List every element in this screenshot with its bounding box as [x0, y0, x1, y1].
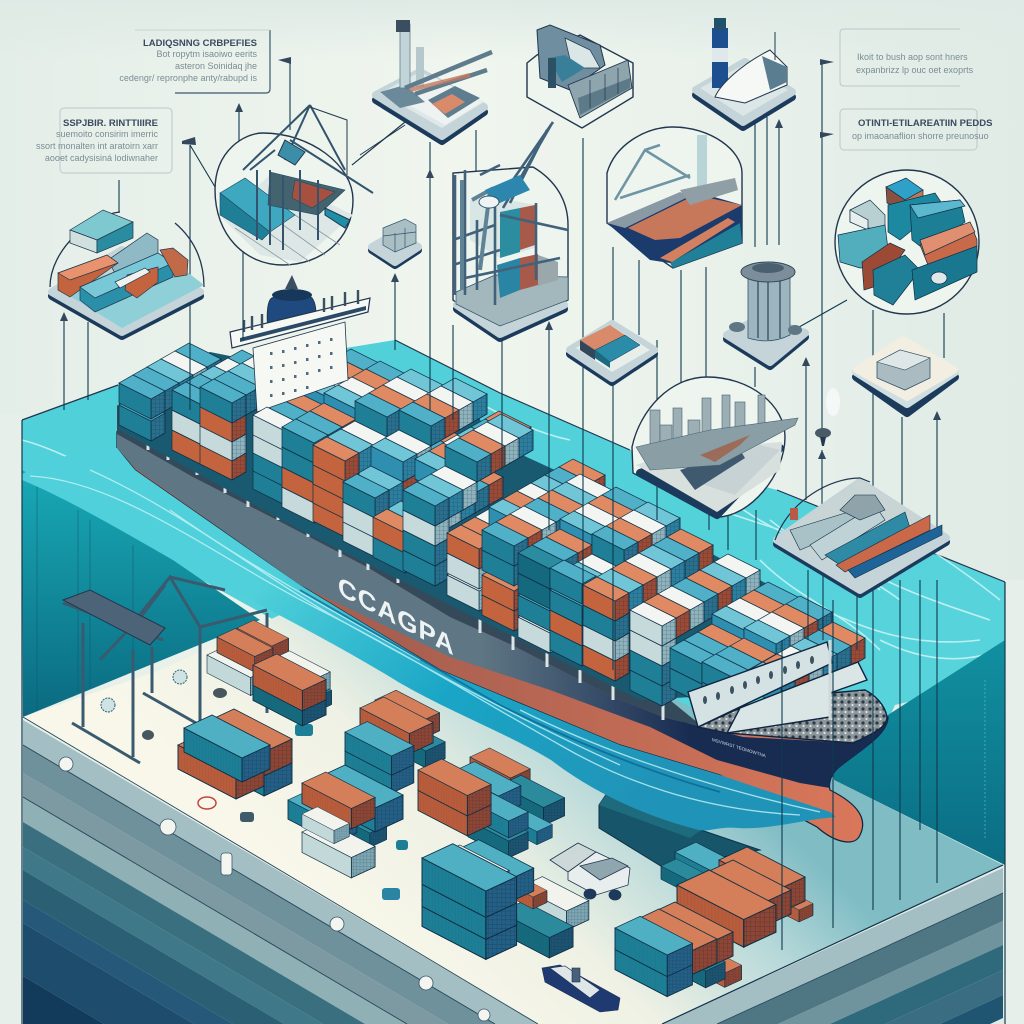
connector lines	[64, 60, 944, 950]
stack three	[418, 748, 564, 858]
text box: pedals	[840, 109, 992, 150]
panel: refinery bubble	[632, 377, 798, 517]
stack two	[345, 690, 445, 793]
text box: ship: aooet cadysisiná lodiwnaher	[45, 153, 158, 163]
text box: ship: ssort monalten int aratoirn xarr	[36, 141, 158, 151]
text box: ship: suemoito consirim imerric	[56, 129, 158, 139]
text box: loading: LADIQSNNG CRBPEFIES	[143, 38, 257, 49]
quay floor	[23, 560, 1003, 1024]
right margin strip	[1005, 580, 1024, 1024]
left margin strip	[0, 415, 22, 1024]
midship container rows	[267, 349, 865, 706]
text box: pedals: op imaoanaflion shorre preunosuo	[852, 131, 989, 141]
panel: container stacks left	[50, 210, 204, 336]
text box: loading: cedengr/ repronphe anty/rabupd is	[119, 73, 257, 83]
panel: container bubble	[835, 170, 979, 314]
bridge superstructure	[230, 275, 370, 412]
stack six	[661, 842, 813, 947]
text box: loading	[119, 30, 270, 93]
panel: quay crane bubble	[215, 105, 410, 265]
top haze	[0, 0, 1024, 60]
text box: pedals: OTINTI-ETILAREATIIN PEDDS	[858, 118, 992, 129]
text box: loading: Bot ropytm isaoiwo eerits	[156, 49, 257, 59]
panel: small block	[372, 219, 418, 265]
panel: tall crane	[453, 122, 568, 338]
text box: ship	[36, 108, 172, 173]
stern container rows	[133, 343, 302, 418]
text box: export: Ikoit to bush aop sont hners	[857, 52, 968, 62]
panel: orange stack plate	[570, 324, 654, 382]
text box: loading: asteron Soinidaq jhe	[175, 61, 257, 71]
panel: long containers plate	[775, 478, 946, 594]
dockside gantry crane	[63, 577, 313, 763]
stack under crane	[207, 620, 332, 726]
stack four	[288, 765, 403, 878]
panel: beige plate building	[856, 339, 955, 413]
text box: ship: SSPJBIR. RINTTIIIRE	[63, 118, 158, 129]
water surface	[22, 340, 1005, 780]
text box: export: expanbrizz lp ouc oet exoprts	[856, 65, 974, 75]
quay side bands left	[23, 717, 538, 1024]
panel: storage tower	[727, 262, 805, 366]
panel: hex building	[527, 25, 633, 128]
quay markers	[59, 757, 490, 1021]
left water wall	[22, 470, 260, 717]
panel: dome dock	[607, 127, 742, 268]
small ship on quay	[542, 965, 620, 1012]
frame edges	[22, 420, 1005, 1024]
ship hull boot-top and bulb	[117, 432, 888, 842]
quay small objects	[198, 797, 408, 900]
right water wall	[830, 640, 1005, 865]
quay side bands right	[662, 865, 1003, 1024]
water sheet over hull	[22, 448, 836, 830]
dark stack under hull	[599, 790, 760, 868]
stack seven	[615, 902, 742, 997]
beacon and smoke	[815, 388, 840, 446]
bow small text: MSVWRST TEOMOWTNA	[712, 737, 767, 759]
arrowheads	[60, 57, 941, 459]
deck machinery band	[117, 405, 703, 727]
stack mass backing	[119, 352, 813, 700]
bow gravel deck and bulkheads	[688, 640, 887, 743]
panel: terminal boom	[360, 20, 492, 155]
stack one	[178, 709, 292, 799]
yard truck	[550, 843, 630, 900]
stack five	[422, 840, 589, 959]
panel: lighthouse and ferry	[696, 18, 792, 127]
midship container columns	[253, 407, 748, 716]
text box: export	[840, 29, 974, 86]
ship hull	[117, 432, 887, 788]
ship name: CCAGPA	[338, 571, 455, 662]
stern container columns	[119, 375, 246, 480]
